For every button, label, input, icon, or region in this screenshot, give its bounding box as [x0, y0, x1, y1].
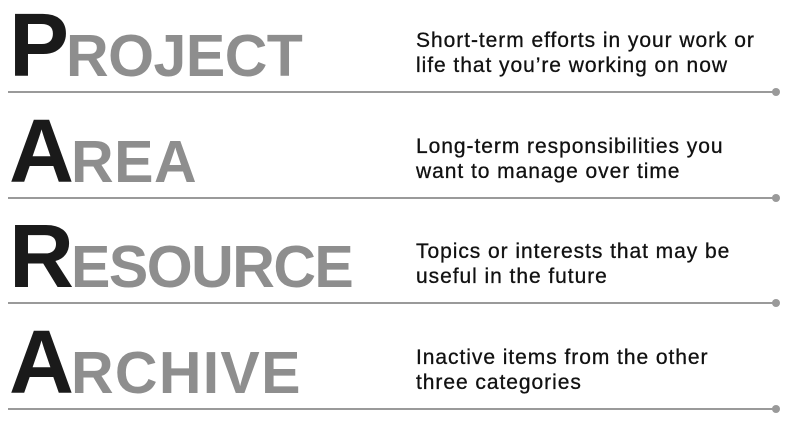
dot marker: [772, 299, 780, 307]
row: resource: [8, 207, 780, 307]
dot marker: [772, 194, 780, 202]
text: resource description: Topics or interests that may be: [416, 240, 730, 263]
text: project description: [416, 29, 755, 77]
dot marker: [772, 404, 780, 412]
text: area description: want to manage over time: [416, 160, 680, 182]
row: area: [8, 102, 780, 202]
text: area description: [416, 134, 723, 183]
text: project description: Short-term efforts in your work or: [416, 29, 755, 52]
text: area description: Long-term responsibilities you: [416, 134, 723, 158]
row: archive: [8, 312, 780, 413]
text: resource description: [416, 240, 730, 288]
heading: resource: RESOURCE: [9, 207, 352, 307]
row: project: [8, 0, 780, 96]
heading: area: AREA: [9, 102, 197, 202]
text: archive description: Inactive items from the other: [416, 346, 708, 368]
text: archive description: three categories: [416, 370, 582, 394]
text: archive description: [416, 346, 708, 394]
dot marker: [772, 88, 780, 96]
heading: archive: ARCHIVE: [9, 312, 302, 412]
text: resource description: useful in the future: [416, 265, 608, 288]
text: project description: life that you’re working on now: [416, 54, 728, 77]
